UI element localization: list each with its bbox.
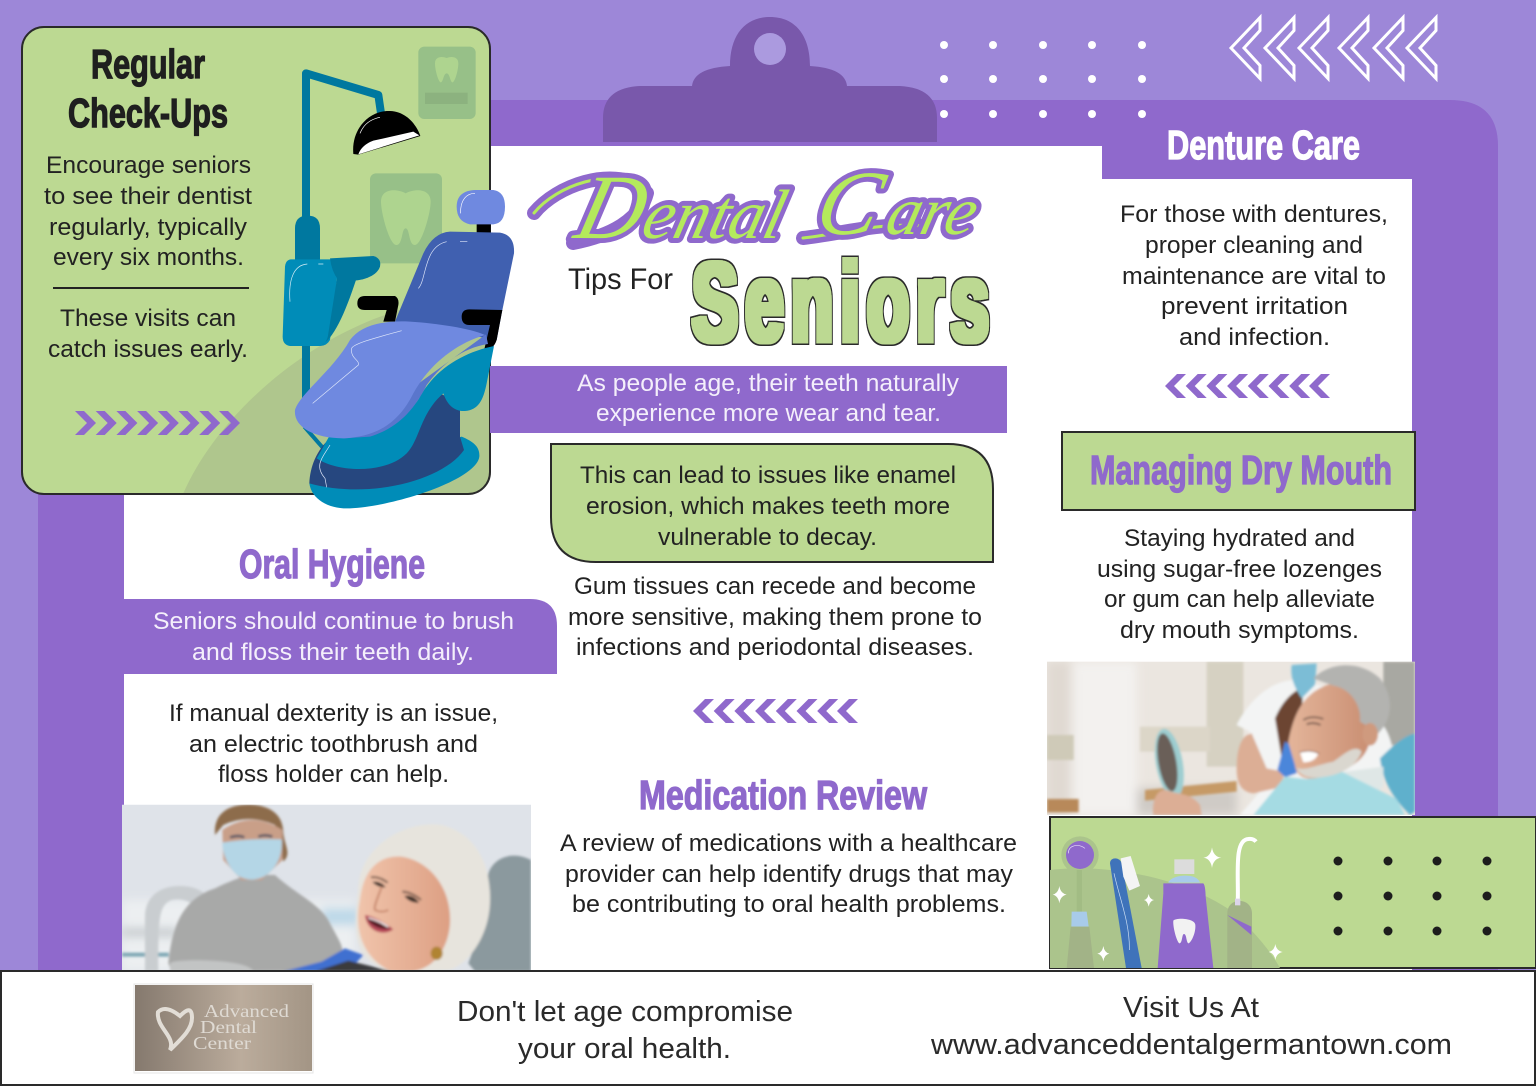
dental tools (1050, 836, 1283, 968)
heading: managing dry mouth: Managing Dry Mouth (1090, 447, 1392, 493)
senior woman face (358, 857, 450, 971)
text: medication review (560, 830, 1017, 918)
callout: enamel erosion: erosion, which makes teeth more (586, 493, 950, 520)
text: encourage seniors (44, 152, 252, 271)
text: denture care: prevent irritation (1161, 293, 1348, 320)
decoration: outlined chevrons (1231, 18, 1436, 78)
intro band: As people age, their teeth naturally (577, 370, 960, 397)
photo: senior man with mirror (1047, 662, 1415, 815)
heading: regular check-ups: Check-Ups (68, 90, 228, 136)
text: denture care (1120, 201, 1388, 351)
nurse (168, 875, 343, 971)
text: gum tissues (568, 573, 982, 661)
clipboard board (38, 100, 1498, 972)
oral hygiene band: and floss their teeth daily. (192, 639, 474, 666)
callout: enamel erosion (551, 444, 993, 562)
bib and collar (1344, 765, 1386, 788)
text: manual dexterity: floss holder can help. (218, 761, 449, 788)
mirror (1154, 728, 1186, 795)
senior woman hair (356, 824, 490, 971)
mouth mirror (1061, 836, 1099, 968)
text: dry mouth: or gum can help alleviate (1104, 586, 1375, 613)
callout: enamel erosion: This can lead to issues like enamel (580, 462, 956, 489)
subtitle: tips for: Tips For (568, 263, 673, 296)
text: manual dexterity: If manual dexterity is an issue, (169, 700, 498, 727)
chair (1380, 733, 1415, 815)
chevrons right (75, 411, 240, 435)
text: gum tissues: more sensitive, making them prone to (568, 604, 982, 631)
chevrons left: center (693, 699, 858, 723)
text: visits catch issues: catch issues early. (48, 336, 248, 363)
text: dry mouth (1097, 525, 1382, 644)
nurse (1237, 680, 1392, 815)
logo: Center (193, 1033, 251, 1053)
oral hygiene band: Seniors should continue to brush (153, 608, 514, 635)
text: medication review: provider can help identify drugs that may (565, 861, 1014, 888)
headrest (468, 856, 531, 971)
intro band: experience more wear and tear. (596, 400, 941, 427)
black dots (1334, 856, 1492, 936)
text: encourage seniors: every six months. (53, 244, 244, 271)
hill background (183, 300, 490, 494)
clipboard clip (603, 17, 937, 142)
title: seniors: Seniors (692, 240, 996, 365)
chair seat (295, 321, 488, 438)
heading: oral hygiene: Oral Hygiene (239, 541, 425, 587)
text: dry mouth: Staying hydrated and (1124, 525, 1355, 552)
toothpaste tube (1158, 859, 1213, 968)
text: medication review: A review of medications with a healthcare (560, 830, 1017, 857)
text: dry mouth: dry mouth symptoms. (1120, 617, 1359, 644)
heading: regular check-ups: Regular (91, 41, 205, 87)
tagline: Don't let age compromise (457, 996, 793, 1028)
panel: dental tools illustration (1050, 817, 1536, 968)
text: encourage seniors: regularly, typically (49, 214, 248, 241)
title: dental care: Care (807, 153, 992, 255)
text: visits catch issues (48, 305, 248, 363)
footer band (1, 971, 1535, 1085)
intro band (490, 366, 1007, 433)
heading: managing dry mouth (1062, 432, 1415, 510)
man face (1288, 683, 1370, 779)
chair base (309, 346, 494, 508)
text: gum tissues: infections and periodontal diseases. (576, 634, 974, 661)
text: visits catch issues: These visits can (60, 305, 236, 332)
tagline: your oral health. (518, 1033, 731, 1065)
panel: regular check-ups (22, 27, 490, 494)
white paper sheet (124, 146, 1412, 972)
callout: enamel erosion: vulnerable to decay. (658, 524, 877, 551)
tagline (457, 996, 793, 1065)
water flosser (1227, 839, 1256, 968)
text: manual dexterity: an electric toothbrush and (189, 731, 478, 758)
illustration: dental chair (283, 47, 514, 508)
oral hygiene band (124, 599, 557, 674)
photo: dentist and senior woman (122, 805, 531, 971)
chair arm rests (357, 296, 502, 351)
man hair (1313, 665, 1390, 733)
chair headrest (457, 190, 505, 235)
website: Visit Us At (1123, 992, 1259, 1024)
text: denture care: maintenance are vital to (1122, 263, 1386, 290)
text: medication review: be contributing to oral health problems. (572, 891, 1006, 918)
swash: D (534, 179, 647, 243)
lamp (353, 111, 420, 155)
text: gum tissues: Gum tissues can recede and become (574, 573, 976, 600)
instrument tray (283, 216, 380, 346)
clip hole (754, 33, 786, 65)
text: manual dexterity (169, 700, 498, 788)
text: dry mouth: using sugar-free lozenges (1097, 556, 1382, 583)
swash: C tail (803, 225, 925, 238)
text: encourage seniors: to see their dentist (44, 183, 252, 210)
lamp arm (306, 73, 381, 400)
toothbrush (1110, 856, 1142, 968)
heading: medication review: Medication Review (639, 772, 927, 818)
text: denture care: proper cleaning and (1145, 232, 1363, 259)
x-ray panels (370, 47, 476, 263)
title: dental care (534, 153, 992, 259)
logo: Dental (200, 1017, 257, 1037)
sparkles (1053, 847, 1283, 961)
logo: Advanced (204, 1001, 289, 1021)
text: denture care: For those with dentures, (1120, 201, 1388, 228)
heading: regular check-ups (68, 41, 228, 136)
chevrons left: denture (1165, 374, 1330, 398)
website: www.advanceddentalgermantown.com (930, 1029, 1452, 1061)
title text: Dental (565, 157, 800, 259)
text: encourage seniors: Encourage seniors (46, 152, 251, 179)
logo (134, 984, 313, 1073)
decoration: white dots (940, 41, 1146, 118)
text: denture care: and infection. (1179, 324, 1330, 351)
logo mark (158, 1009, 192, 1050)
chair back (395, 232, 514, 340)
website (930, 992, 1452, 1061)
heading: denture care: Denture Care (1167, 122, 1360, 168)
